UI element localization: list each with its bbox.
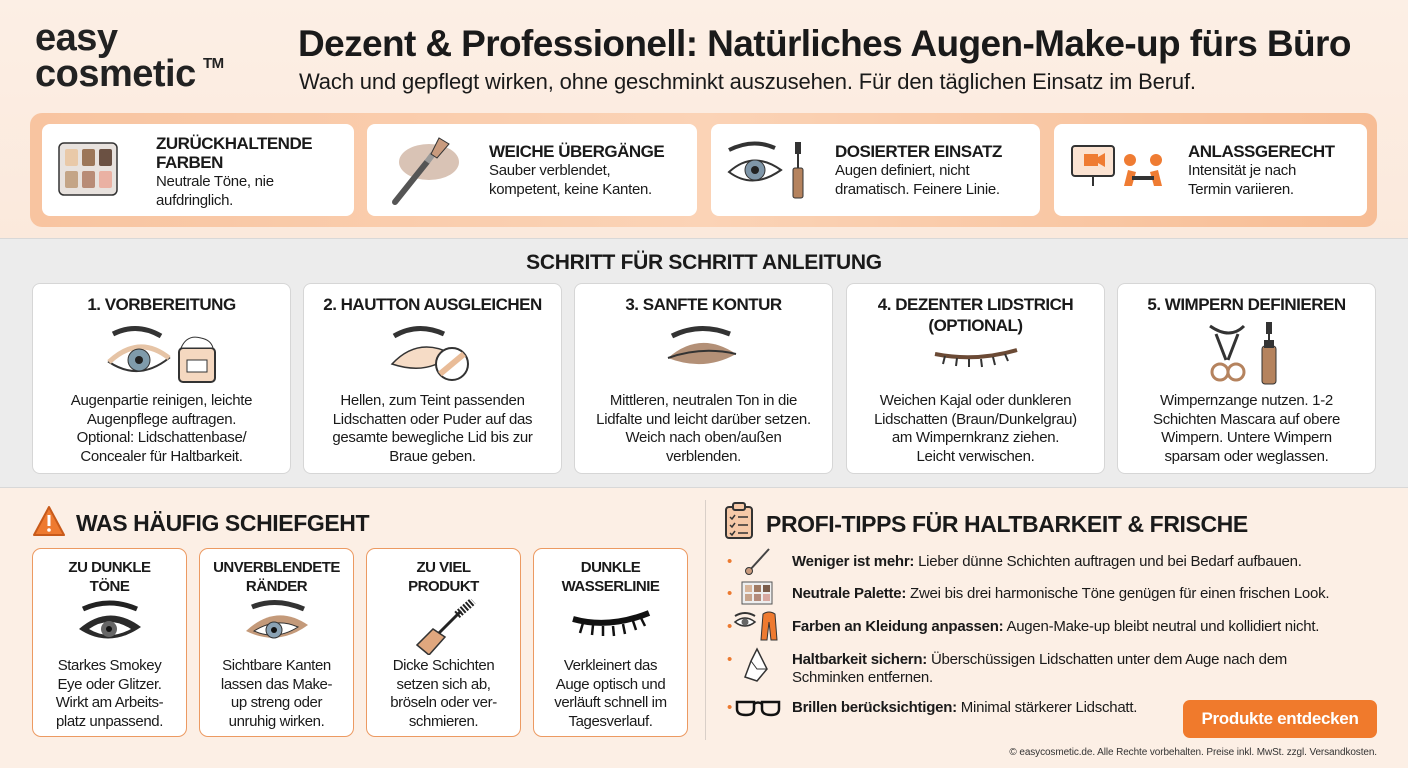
step 4: Weichen Kajal oder dunkleren	[880, 392, 1071, 409]
text: Farben an Kleidung anpassen: Augen-Make-up bleibt neutral und kollidiert nicht.	[792, 618, 1319, 635]
text: •	[727, 699, 732, 716]
error 1: TÖNE	[90, 578, 129, 595]
step 2: Lidschatten oder Puder auf das	[333, 410, 532, 428]
footer: © easycosmetic.de. Alle Rechte vorbehalten. Preise inkl. MwSt. zzgl. Versandkosten.	[1009, 747, 1377, 758]
card: zurückhaltende farben: Neutrale Töne, nie	[156, 173, 274, 190]
error 4: Tagesverlauf.	[568, 712, 653, 730]
step 5: Schichten Mascara auf obere	[1153, 410, 1340, 428]
icon: eye with cream	[107, 326, 216, 383]
logo	[35, 17, 224, 95]
text: Brillen berücksichtigen: Minimal stärkerer Lidschatt.	[792, 699, 1137, 716]
step 1: 1. VORBEREITUNG	[87, 295, 236, 314]
logo: cosmetic	[35, 53, 196, 95]
button	[1183, 700, 1377, 738]
icon: smokey eye	[79, 600, 141, 638]
steps section background	[0, 238, 1408, 488]
step 3: Mittleren, neutralen Ton in die	[610, 392, 797, 409]
tip 3	[727, 612, 1319, 640]
error 3: schmieren.	[409, 712, 478, 730]
card: dosierter einsatz: Augen definiert, nicht	[835, 162, 969, 179]
icon: harsh shadow eye	[246, 600, 308, 638]
text: Neutrale Palette: Zwei bis drei harmonische Töne genügen für einen frischen Look.	[792, 585, 1329, 602]
step 1: Concealer für Haltbarkeit.	[80, 448, 243, 464]
error 4: DUNKLE	[581, 559, 640, 576]
card: zurückhaltende farben	[42, 124, 354, 216]
step 2: gesamte bewegliche Lid bis zur	[332, 429, 533, 446]
tip 1	[727, 548, 1302, 575]
subtitle: Wach und gepflegt wirken, ohne geschminkt auszusehen. Für den täglichen Einsatz im Beruf.	[299, 69, 1196, 94]
card: zurückhaltende farben: aufdringlich.	[156, 192, 233, 209]
error 2: up streng oder	[231, 694, 322, 711]
card: weiche übergänge: kompetent, keine Kanten.	[489, 181, 652, 198]
card: zurückhaltende farben: FARBEN	[156, 153, 223, 172]
icon: tissue	[744, 648, 768, 682]
principles band	[30, 113, 1377, 227]
step 2: Braue geben.	[389, 448, 476, 464]
text: Schminken entfernen.	[792, 669, 933, 686]
step 4: Leicht verwischen.	[916, 448, 1034, 464]
tip 2	[727, 582, 1329, 604]
icon: eye with powder	[390, 326, 469, 381]
tips heading	[725, 502, 1248, 539]
tips heading: PROFI-TIPPS FÜR HALTBARKEIT & FRISCHE	[766, 511, 1248, 537]
card: anlassgerecht: Termin variieren.	[1188, 181, 1294, 198]
step 4: 4. DEZENTER LIDSTRICH	[878, 295, 1073, 314]
error 3: ZU VIEL	[416, 559, 470, 576]
card: zurückhaltende farben: ZURÜCKHALTENDE	[156, 134, 312, 153]
step 2: Hellen, zum Teint passenden	[340, 392, 525, 409]
error 2: lassen das Make-	[221, 676, 332, 692]
error 3: setzen sich ab,	[396, 676, 491, 692]
logo: TM	[203, 55, 224, 72]
step 4	[846, 283, 1105, 474]
step 3: 3. SANFTE KONTUR	[625, 295, 782, 314]
card: anlassgerecht: ANLASSGERECHT	[1188, 142, 1335, 161]
icon: palette	[58, 142, 118, 196]
step 3: Lidfalte und leicht darüber setzen.	[596, 410, 811, 428]
step 4: (OPTIONAL)	[928, 316, 1023, 335]
icon: thin brush	[745, 548, 770, 575]
text: Haltbarkeit sichern: Überschüssigen Lidschatten unter dem Auge nach dem	[792, 651, 1287, 668]
error 4: Verkleinert das	[564, 657, 657, 674]
icon: eye with brown shadow	[668, 326, 736, 364]
icon: brush	[392, 137, 459, 205]
text: •	[727, 651, 732, 668]
step 4: Lidschatten (Braun/Dunkelgrau)	[874, 410, 1077, 428]
error 3	[366, 548, 521, 737]
card: weiche übergänge	[367, 124, 697, 216]
error 4	[533, 548, 688, 737]
card: weiche übergänge: Sauber verblendet,	[489, 162, 610, 179]
error 3: PRODUKT	[408, 578, 479, 595]
step 1: Optional: Lidschattenbase/	[77, 429, 246, 446]
step 2	[303, 283, 562, 474]
title: Dezent & Professionell: Natürliches Augen-Make-up fürs Büro	[298, 23, 1351, 64]
error 2: RÄNDER	[246, 578, 307, 595]
error 4: verläuft schnell im	[554, 694, 667, 711]
tip 5	[727, 699, 1137, 716]
step 3: Weich nach oben/außen	[625, 429, 782, 446]
error 1: ZU DUNKLE	[68, 559, 151, 576]
error 2: UNVERBLENDETE	[213, 559, 340, 576]
icon: clipboard	[725, 502, 753, 539]
step 2: 2. HAUTTON AUSGLEICHEN	[323, 295, 542, 314]
error 2	[199, 548, 354, 737]
header background	[0, 0, 1408, 238]
steps heading: SCHRITT FÜR SCHRITT ANLEITUNG	[526, 251, 882, 274]
icon: eye and mascara	[728, 142, 804, 198]
step 5: 5. WIMPERN DEFINIEREN	[1147, 295, 1346, 314]
divider	[705, 500, 706, 740]
text: •	[727, 585, 732, 602]
error 1	[32, 548, 187, 737]
text: •	[727, 553, 732, 570]
tip 4	[727, 648, 1287, 686]
icon: warning triangle	[33, 506, 65, 536]
error 2: unruhig wirken.	[229, 712, 324, 730]
icon: lash line	[934, 348, 1018, 368]
step 5: Wimpernzange nutzen. 1-2	[1160, 392, 1333, 409]
text: Weniger ist mehr: Lieber dünne Schichten auftragen und bei Bedarf aufbauen.	[792, 553, 1302, 570]
icon: mascara wand	[416, 599, 476, 655]
icon: heavy lash line	[572, 610, 650, 636]
step 5: Wimpern. Untere Wimpern	[1161, 429, 1332, 446]
error 4: Auge optisch und	[556, 676, 665, 692]
logo: easy	[35, 17, 118, 59]
text: •	[727, 618, 732, 635]
card: anlassgerecht: Intensität je nach	[1188, 162, 1296, 179]
card: dosierter einsatz: dramatisch. Feinere Linie.	[835, 181, 1000, 198]
icon: glasses	[736, 700, 780, 716]
error 1: platz unpassend.	[56, 712, 163, 730]
warning heading: WAS HÄUFIG SCHIEFGEHT	[76, 510, 369, 536]
icon: mini palette	[742, 582, 772, 604]
step 4: am Wimpernkranz ziehen.	[892, 429, 1059, 446]
error 4: WASSERLINIE	[562, 578, 659, 595]
card: anlassgerecht	[1054, 124, 1367, 216]
step 1: Augenpartie reinigen, leichte	[71, 392, 252, 409]
step 3: verblenden.	[666, 448, 741, 464]
error 1: Eye oder Glitzer.	[57, 676, 162, 692]
step 3	[574, 283, 833, 474]
card: dosierter einsatz	[711, 124, 1040, 216]
step 1	[32, 283, 291, 474]
step 5	[1117, 283, 1376, 474]
error 1: Starkes Smokey	[58, 657, 161, 674]
step 5: sparsam oder weglassen.	[1164, 448, 1329, 464]
error 3: bröseln oder ver-	[390, 694, 497, 711]
card: dosierter einsatz: DOSIERTER EINSATZ	[835, 142, 1002, 161]
step 1: Augenpflege auftragen.	[87, 410, 236, 428]
icon: meeting	[1071, 145, 1162, 186]
button: Produkte entdecken	[1201, 709, 1359, 728]
error 2: Sichtbare Kanten	[222, 657, 331, 674]
icon: curler and mascara	[1209, 322, 1276, 384]
error 3: Dicke Schichten	[393, 657, 494, 674]
error 1: Wirkt am Arbeits-	[56, 694, 163, 711]
icon: eye and scarf	[734, 612, 778, 640]
card: weiche übergänge: WEICHE ÜBERGÄNGE	[489, 142, 664, 161]
